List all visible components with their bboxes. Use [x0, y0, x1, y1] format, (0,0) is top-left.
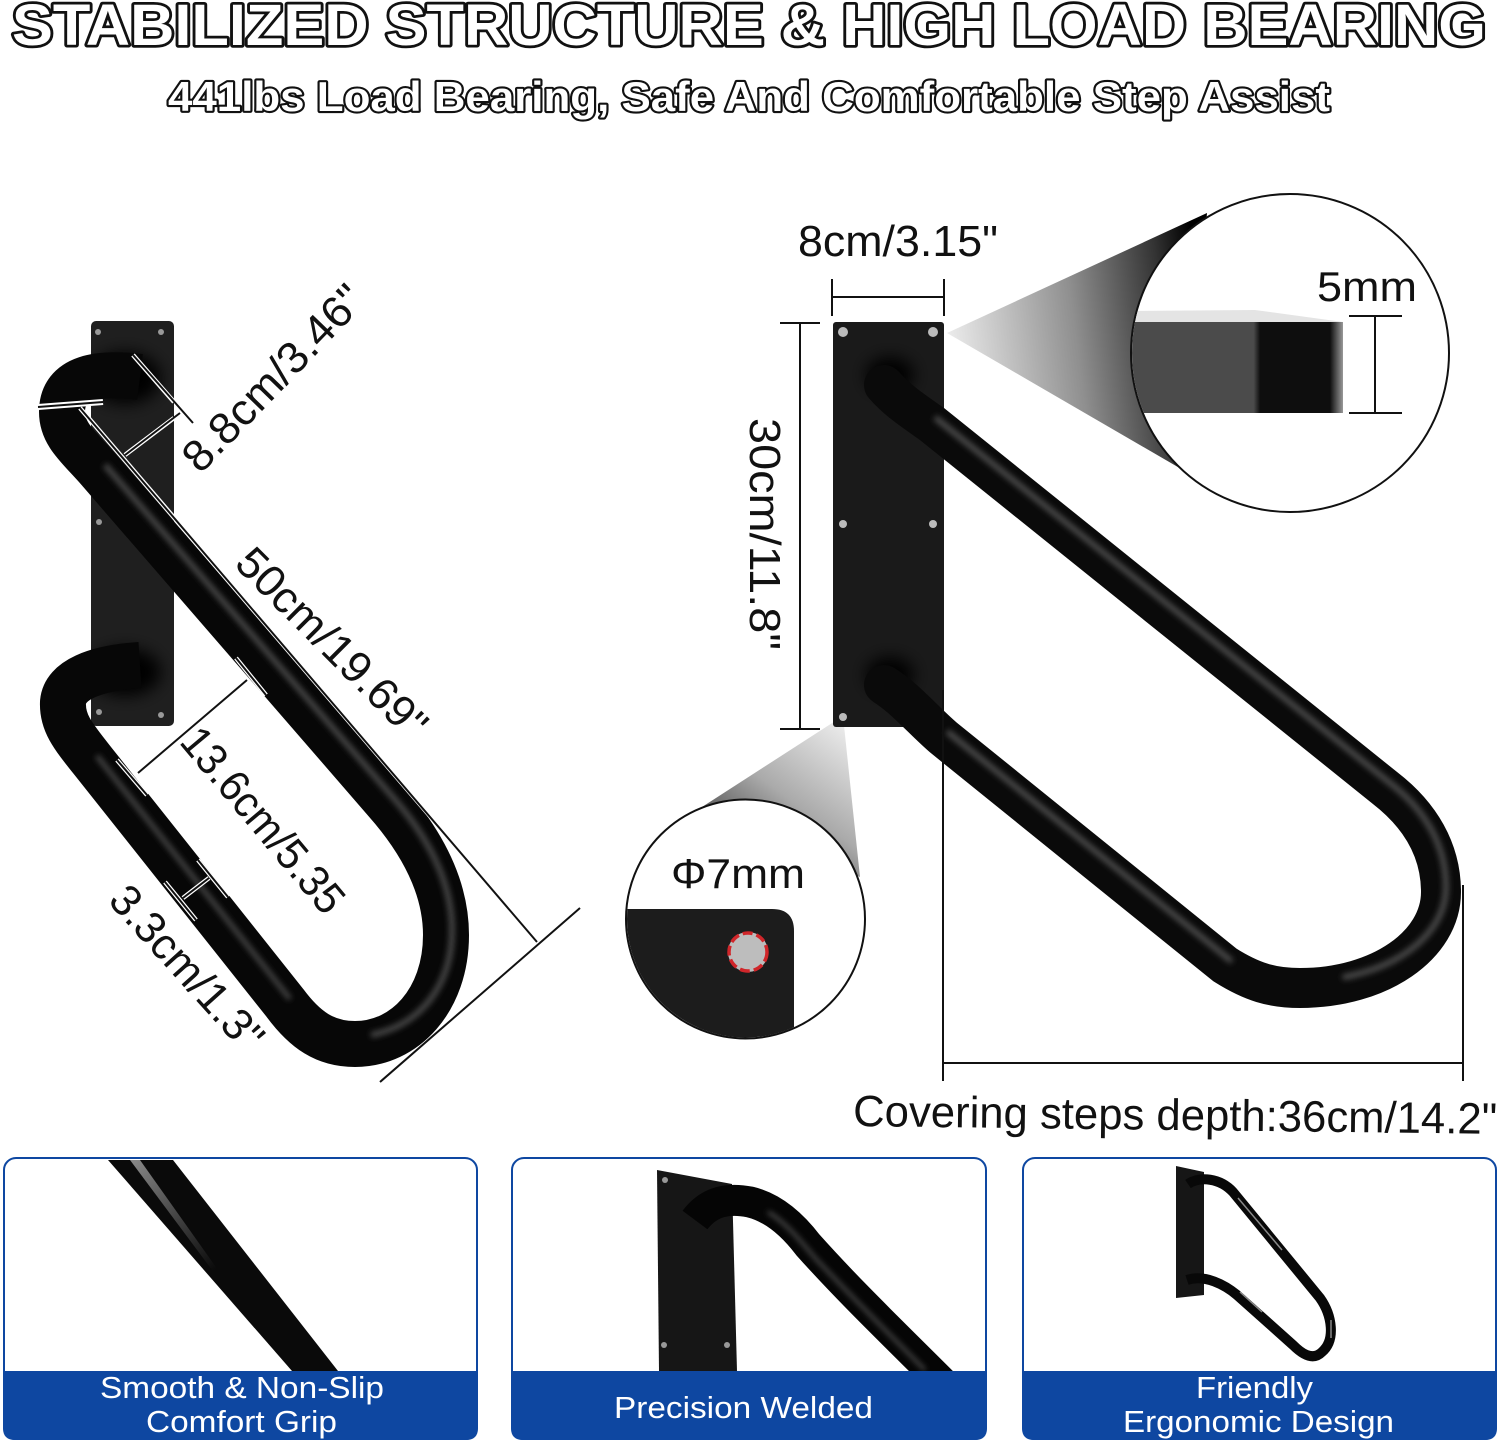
caption text: Ergonomic Design	[1123, 1404, 1394, 1439]
magnifier: 5mm thickness	[1125, 194, 1449, 512]
label: 30cm: 30cm/11.8"	[740, 418, 789, 650]
mini handrail	[1176, 1166, 1331, 1356]
caption text: Precision Welded	[614, 1390, 873, 1425]
dimension: 8.8cm lines	[38, 355, 193, 455]
caption band	[1022, 1371, 1497, 1440]
caption text	[1123, 1370, 1394, 1439]
caption text	[100, 1370, 384, 1439]
dimension: 3.3cm ticks	[165, 860, 228, 920]
label: 50cm: 50cm/19.69"	[226, 538, 437, 749]
label: 3.3cm: 3.3cm/1.3"	[100, 875, 274, 1061]
right handrail diagram with dimensions	[620, 194, 1497, 1144]
label: 13.6cm: 13.6cm/5.35	[171, 717, 355, 923]
dimension: depth	[943, 690, 1463, 1081]
label: 8cm: 8cm/3.15"	[798, 217, 998, 266]
dimension: 50cm length lines	[80, 408, 580, 1082]
caption text: Smooth & Non-Slip	[100, 1370, 384, 1405]
label: 8.8cm: 8.8cm/3.46"	[172, 275, 374, 482]
zoom cone to plate thickness	[947, 213, 1207, 470]
wall plate, left view	[89, 321, 174, 726]
magnifier: 7mm hole: Φ7mm	[671, 850, 805, 897]
tube close-up	[108, 1160, 338, 1371]
card: ergonomic design	[1022, 1158, 1497, 1440]
label: covering steps depth: Covering steps depth:36cm/14.2"	[853, 1087, 1497, 1144]
caption band	[511, 1371, 987, 1440]
U-shaped tube, left view	[62, 375, 452, 1044]
caption band	[3, 1371, 478, 1440]
zoom cone to mounting hole	[702, 716, 860, 877]
caption text: Comfort Grip	[146, 1404, 337, 1439]
U-shaped tube, right view	[884, 385, 1446, 988]
magnifier: 7mm hole	[620, 800, 865, 1045]
dimension: 13.6cm lines	[117, 658, 266, 795]
card: precision welded	[511, 1158, 987, 1440]
wall plate, right view	[833, 322, 944, 727]
caption text: Friendly	[1196, 1370, 1314, 1405]
card: comfort grip	[3, 1158, 478, 1440]
dimension: plate width	[832, 279, 944, 316]
dimension: plate height	[780, 323, 820, 729]
subtitle: 441lbs Load Bearing, Safe And Comfortable Step Assist	[168, 73, 1330, 120]
magnifier: 5mm thickness: 5mm	[1317, 263, 1417, 310]
left handrail diagram with dimensions	[38, 275, 580, 1082]
plate and welded tube	[657, 1170, 950, 1390]
